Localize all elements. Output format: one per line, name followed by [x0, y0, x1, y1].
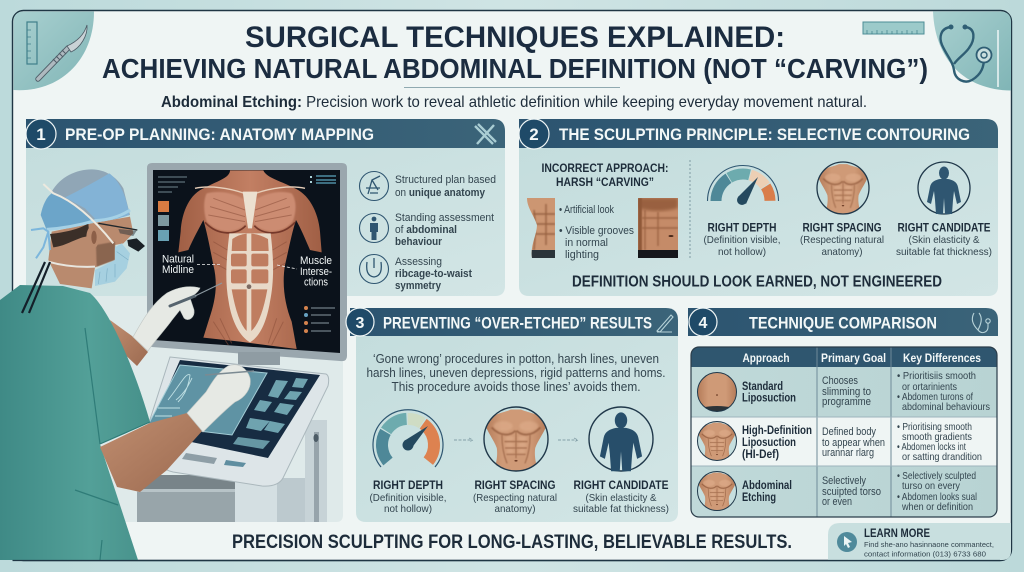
panel 3 header: 3: [356, 315, 365, 332]
panel 3 header: [346, 308, 678, 336]
label: right depth: RIGHT DEPTH: [373, 480, 443, 492]
icon: depth gauge: [373, 410, 443, 467]
panel 2 header: THE SCULPTING PRINCIPLE: SELECTIVE CONTOURING: [559, 125, 970, 144]
table header row: [742, 351, 981, 365]
title: [102, 21, 928, 84]
panel 4 header: [688, 308, 998, 336]
panel 2 header: 2: [529, 125, 539, 144]
row: standard liposuction: • Prioritisiis smooth: [897, 370, 976, 382]
row: abdominal etching: or even: [822, 496, 852, 508]
arrow: [454, 438, 473, 442]
definition statement: DEFINITION SHOULD LOOK EARNED, NOT ENGINEERED: [572, 274, 942, 290]
row: abdominal etching: Abdominal: [742, 480, 792, 492]
row: high-definition liposuction: (HI-Def): [742, 449, 779, 461]
torso muscle map: [178, 170, 322, 349]
learn more callout: [828, 523, 1011, 560]
panel 1 header: 1: [36, 125, 46, 144]
label: natural midline: Natural: [162, 254, 194, 266]
label: right depth: [370, 480, 446, 515]
paragraph: This procedure avoids those lines’ avoids them.: [392, 380, 640, 394]
bullet: structured plan: [360, 172, 496, 200]
table header row: Primary Goal: [821, 351, 886, 365]
row: abdominal etching: when or definition: [901, 501, 973, 513]
icon: depth gauge: [708, 165, 778, 205]
bullet: ribcage symmetry: ribcage-to-waist: [395, 268, 472, 280]
bullet: structured plan: on unique anatomy: [395, 187, 486, 199]
panel 4: technique comparison: [688, 308, 998, 517]
row: high-definition liposuction: Defined body: [822, 426, 876, 438]
panel 3 header: PREVENTING “OVER-ETCHED” RESULTS: [383, 314, 652, 332]
row: high-definition liposuction: • Abdomen locks int: [897, 441, 966, 453]
row: high-definition liposuction: to appear when: [822, 437, 885, 449]
label: right depth: [704, 222, 780, 258]
bullet: standing assessment: of abdominal: [395, 224, 457, 236]
panel 1 header: PRE-OP PLANNING: ANATOMY MAPPING: [65, 125, 374, 144]
row: high-definition liposuction: or satting drandition: [902, 451, 982, 463]
bullets: • Artificial look: [559, 204, 614, 216]
corner decoration: stethoscope and ruler: [863, 12, 1011, 90]
row: standard liposuction: programme: [822, 396, 871, 408]
row: abdominal etching: scuipted torso: [822, 486, 881, 498]
row: abdominal etching: turso on every: [902, 480, 961, 492]
table header row: Key Differences: [903, 351, 981, 365]
title: SURGICAL TECHNIQUES EXPLAINED:: [245, 21, 785, 54]
row: standard liposuction: slimming to: [822, 386, 871, 398]
label: right candidate: RIGHT CANDIDATE: [898, 222, 991, 234]
bullet: standing assessment: behaviour: [395, 236, 443, 248]
label: right depth: (Definition visible,: [370, 492, 446, 504]
panel 4 header: TECHNIQUE COMPARISON: [749, 314, 937, 332]
learn more callout: Find she-ano hasinnaone commantect,: [864, 540, 994, 549]
panel 3: preventing over-etched results: [346, 308, 678, 522]
row: high-definition liposuction: [697, 421, 982, 463]
label: right depth: RIGHT DEPTH: [708, 222, 776, 234]
label: right depth: (Definition visible,: [704, 234, 780, 246]
icon: abs circle: [484, 407, 548, 471]
panel 2: sculpting principle: [519, 119, 998, 296]
label: right spacing: RIGHT SPACING: [474, 480, 556, 492]
row: high-definition liposuction: smooth gradients: [902, 431, 972, 443]
label: right candidate: RIGHT CANDIDATE: [574, 480, 669, 492]
incorrect approach: INCORRECT APPROACH:: [542, 163, 668, 175]
icon: candidate silhouette: [918, 162, 970, 214]
comparison table: [691, 347, 997, 517]
panel 1: pre-op planning: [26, 119, 505, 296]
bullets: [559, 204, 634, 261]
row: high-definition liposuction: Liposuction: [742, 437, 796, 449]
icon: abs circle: [817, 162, 869, 214]
bullet: structured plan: Structured plan based: [395, 174, 496, 186]
row: abdominal etching: [697, 470, 977, 513]
bullets: in normal: [565, 237, 608, 249]
label: right candidate: (Skin elasticity &: [908, 234, 980, 246]
bullet: ribcage symmetry: [360, 254, 472, 292]
monitor with anatomy map: [147, 163, 347, 365]
panel 4 header: 4: [699, 315, 708, 332]
bullet: ribcage symmetry: symmetry: [395, 280, 442, 292]
row: standard liposuction: [697, 372, 990, 412]
surgeon figure: [0, 169, 254, 560]
label: muscle intersections: Interse-: [300, 266, 332, 278]
bullet: standing assessment: [360, 212, 494, 248]
learn more callout: contact information (013) 6733 680: [864, 550, 986, 558]
icon: candidate silhouette: [589, 407, 653, 471]
lower forearm and gloved hand: [100, 365, 254, 492]
paragraph: [366, 352, 666, 394]
panel 2 header: [519, 119, 998, 149]
stethoscope cords: [22, 262, 50, 313]
bullets: lighting: [565, 249, 599, 261]
title: ACHIEVING NATURAL ABDOMINAL DEFINITION (NOT “CARVING”): [102, 53, 928, 84]
illustration backdrop: [90, 296, 343, 522]
console with touch screen: [137, 357, 329, 522]
label: right spacing: (Respecting natural: [473, 492, 557, 504]
label: natural midline: Midline: [162, 264, 194, 276]
bullet: standing assessment: Standing assessment: [395, 212, 494, 224]
row: abdominal etching: • Abdomen looks sual: [897, 491, 977, 503]
raised forearm and gloved hand: [110, 283, 222, 366]
row: abdominal etching: Etching: [742, 492, 776, 504]
paragraph: harsh lines, uneven depressions, rigid patterns and homs.: [366, 366, 666, 380]
row: standard liposuction: Chooses: [822, 375, 858, 387]
arrow: [558, 438, 578, 442]
screen interface elements: [158, 176, 336, 333]
label: right candidate: (Skin elasticity &: [586, 492, 656, 504]
incorrect approach: [527, 163, 678, 261]
row: standard liposuction: abdominal behaviours: [902, 401, 990, 413]
label: right spacing: [473, 480, 557, 515]
row: abdominal etching: • Selectively sculpted: [897, 470, 976, 482]
subtitle: Abdominal Etching: Precision work to reveal athletic definition while keeping everyday movement natural.: [161, 94, 867, 111]
label: right candidate: suitable fat thickness): [896, 246, 992, 258]
label: right spacing: (Respecting natural: [800, 234, 884, 246]
torso: carved left: [527, 198, 555, 258]
row: standard liposuction: Standard: [742, 381, 783, 393]
torso: carved right: [638, 198, 678, 258]
label: right depth: not hollow): [384, 503, 432, 515]
bottom statement: PRECISION SCULPTING FOR LONG-LASTING, BELIEVABLE RESULTS.: [232, 532, 792, 553]
row: standard liposuction: Liposuction: [742, 392, 796, 404]
row: high-definition liposuction: • Prioritising smooth: [897, 421, 972, 433]
row: high-definition liposuction: High-Definition: [742, 425, 812, 437]
corner decoration: scalpel and ruler: [14, 12, 94, 90]
label: right spacing: anatomy): [494, 503, 536, 515]
incorrect approach: HARSH “CARVING”: [556, 177, 654, 189]
label: right candidate: suitable fat thickness): [573, 503, 669, 515]
label: right spacing: [800, 222, 884, 258]
label: right candidate: [896, 222, 992, 258]
label: natural midline: [162, 254, 222, 276]
panel 1 header: [26, 119, 505, 149]
paragraph: ‘Gone wrong’ procedures in potton, harsh lines, uneven: [373, 352, 659, 366]
bullet: ribcage symmetry: Assessing: [395, 256, 442, 268]
label: muscle intersections: Muscle: [300, 255, 332, 267]
table header row: Approach: [742, 351, 790, 365]
row: standard liposuction: • Abdomen turons of: [897, 391, 973, 403]
label: right spacing: RIGHT SPACING: [802, 222, 882, 234]
label: muscle intersections: ctions: [304, 276, 328, 288]
label: right spacing: anatomy): [822, 246, 862, 258]
scrub top: [0, 285, 150, 560]
label: right depth: not hollow): [718, 246, 766, 258]
row: abdominal etching: Selectively: [822, 475, 866, 487]
head and cap: [31, 169, 145, 288]
learn more callout: LEARN MORE: [864, 528, 930, 540]
label: muscle intersections: [277, 255, 332, 288]
row: high-definition liposuction: urannar rlarg: [822, 447, 874, 459]
label: right candidate: [573, 480, 669, 515]
row: standard liposuction: or ortarinients: [902, 381, 957, 393]
bullets: • Visible grooves: [559, 225, 634, 237]
